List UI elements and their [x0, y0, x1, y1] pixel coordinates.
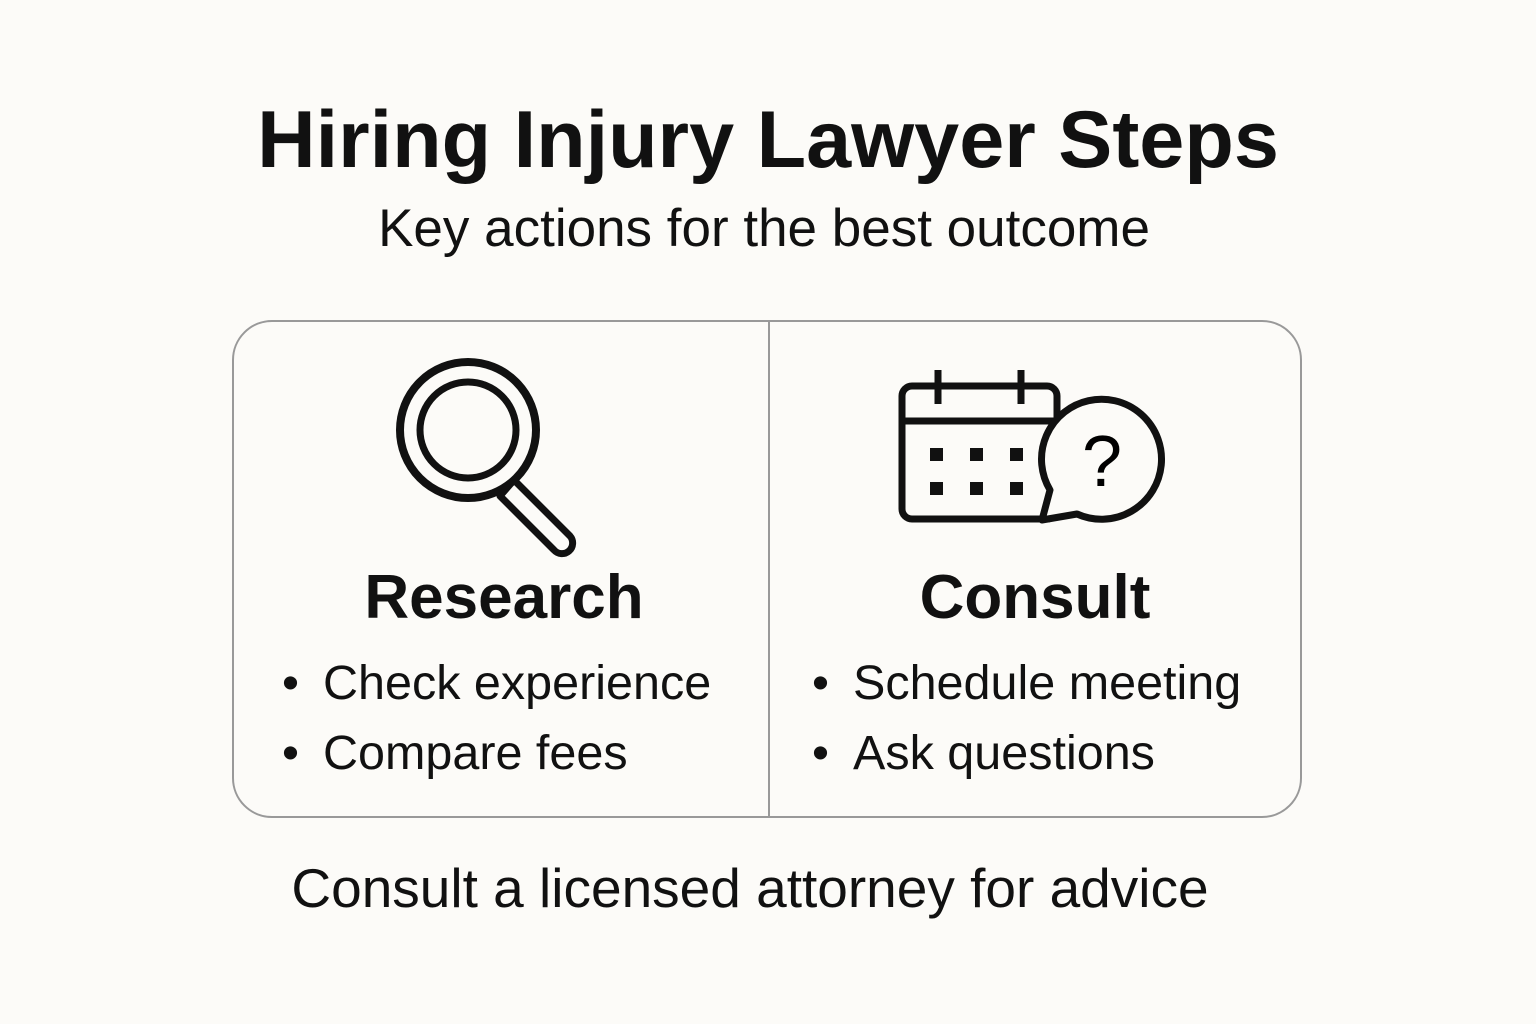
heading: consult: Consult: [920, 563, 1150, 632]
subtitle: Key actions for the best outcome: [378, 199, 1150, 258]
bullet list: consult: • Ask questions: [812, 726, 1155, 780]
footer note: Consult a licensed attorney for advice: [291, 857, 1209, 919]
panel container: [232, 320, 1302, 818]
title: Hiring Injury Lawyer Steps: [257, 95, 1279, 185]
icon: calendar with question bubble: ?: [1082, 422, 1122, 502]
bullet list: research: • Check experience: [282, 656, 711, 710]
icon: magnifying glass: [396, 358, 576, 558]
bullet list: research: • Compare fees: [282, 726, 628, 780]
bullet list: consult: [812, 656, 1241, 780]
panel: research: [234, 322, 770, 816]
bullet list: research: [282, 656, 711, 780]
bullet list: consult: • Schedule meeting: [812, 656, 1241, 710]
icon: calendar with question bubble: [898, 370, 1165, 524]
panel: consult: [812, 370, 1241, 780]
heading: research: Research: [364, 563, 644, 632]
